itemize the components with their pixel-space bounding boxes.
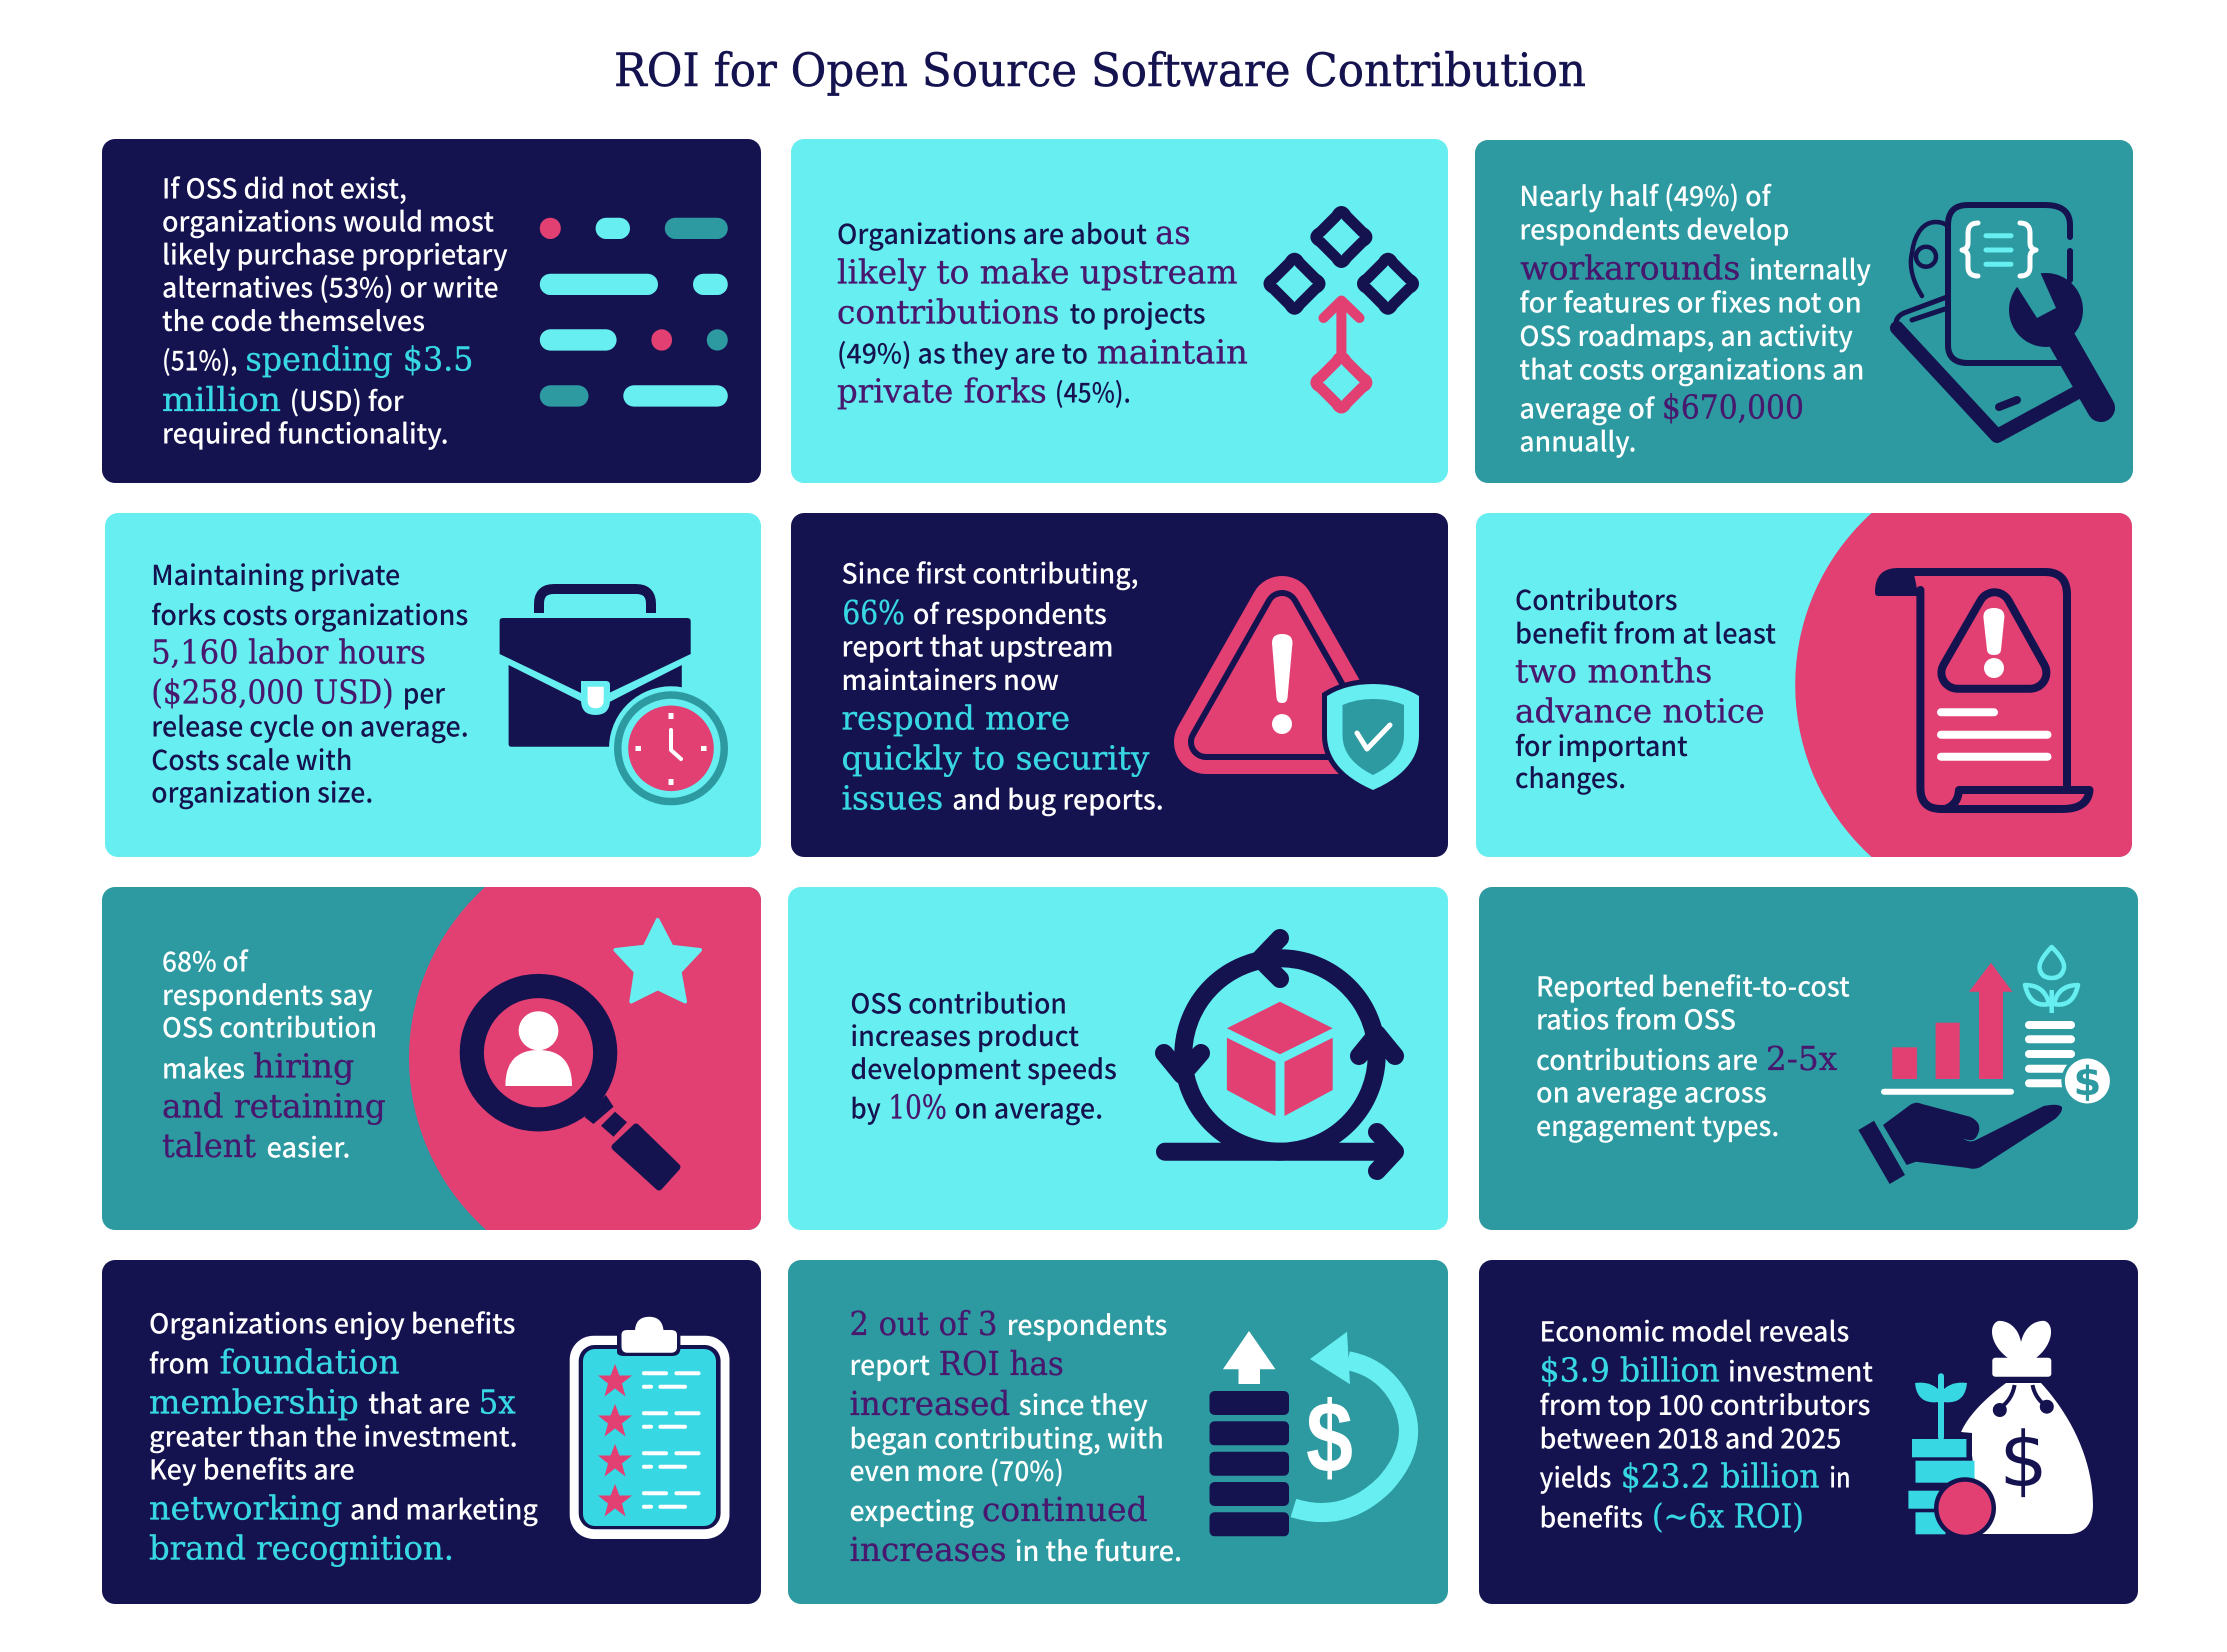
panel: hiring [102, 887, 761, 1230]
text block: that are [368, 1381, 470, 1421]
text block: networking [149, 1488, 342, 1527]
panel background [102, 887, 761, 1230]
panel background [791, 513, 1448, 857]
text block: increased [850, 1384, 1010, 1423]
text block: by [850, 1086, 881, 1126]
text block: in the future. [1015, 1529, 1182, 1569]
panel: benefit-to-cost [1479, 887, 2138, 1230]
text block: per [403, 671, 446, 711]
icon: clipboard with stars [570, 1313, 730, 1539]
text block: yields [1540, 1456, 1612, 1496]
icon: briefcase and clock [500, 589, 733, 810]
text block: ROI has [939, 1344, 1064, 1383]
text block: respondents say [162, 973, 373, 1013]
text block: two months [1515, 652, 1712, 691]
icon: money bag with plant and coins [1908, 1321, 2093, 1539]
text block: million [162, 380, 281, 419]
text block: issues [842, 778, 943, 817]
text block: private forks [837, 372, 1047, 411]
panel background [102, 1260, 761, 1604]
text block: (51%), [162, 339, 238, 379]
icon: money bag with plant and coins: $ [1999, 1415, 2048, 1504]
text block: report that upstream [842, 625, 1114, 665]
text block: from [149, 1341, 210, 1381]
text block: Key benefits are [149, 1447, 355, 1487]
icon: diamonds and arrow [1269, 212, 1414, 408]
text block: benefit from at least [1515, 611, 1776, 651]
text block: membership [149, 1382, 359, 1421]
panel background [788, 1260, 1448, 1604]
text block: since they [1019, 1383, 1148, 1423]
text block: talent [162, 1126, 256, 1165]
text block: maintain [1097, 332, 1248, 371]
text block: likely to make upstream [837, 252, 1238, 291]
text block: report [850, 1343, 930, 1383]
text block: on average across [1536, 1071, 1767, 1111]
text block: respond more [842, 698, 1070, 737]
text block: Since first contributing, [842, 551, 1138, 591]
text block [1536, 965, 1850, 1144]
text block: required functionality. [162, 412, 449, 452]
text block: to projects [1070, 291, 1206, 331]
panel: development speed [788, 887, 1448, 1230]
text block: the code themselves [162, 299, 425, 339]
text block: Organizations enjoy benefits [149, 1301, 516, 1341]
panel background [1476, 513, 2132, 857]
text block: 5,160 labor hours [151, 632, 426, 671]
icon: stack with dollar and arrows [1210, 1331, 1409, 1536]
text block: (49%) as they are to [837, 331, 1088, 371]
text block: Contributors [1515, 578, 1678, 618]
text block: 5x [479, 1382, 516, 1421]
text block: of respondents [913, 592, 1107, 632]
text block: (~6x ROI) [1652, 1496, 1804, 1535]
text block [1515, 578, 1776, 796]
title: ROI for Open Source Software Contribution [614, 43, 1586, 97]
text block: OSS contribution [850, 981, 1067, 1021]
text block: changes. [1515, 756, 1626, 796]
text block: increases [850, 1530, 1006, 1569]
text block: likely purchase proprietary [162, 232, 508, 272]
text block: respondents [1007, 1303, 1167, 1343]
text block: on average. [954, 1086, 1103, 1126]
text block: Reported benefit-to-cost [1536, 965, 1850, 1005]
text block: for important [1515, 724, 1688, 764]
panel background [102, 139, 761, 483]
text block: organizations would most [162, 200, 494, 240]
text block: engagement types. [1536, 1104, 1779, 1144]
text block: $670,000 [1662, 387, 1804, 426]
text block: annually. [1519, 420, 1636, 460]
text block: release cycle on average. [151, 705, 469, 745]
text block: expecting [850, 1489, 974, 1529]
icon: agile cycle with box [1164, 938, 1395, 1171]
panel: ROI has increased [788, 1260, 1448, 1604]
text block: foundation [220, 1342, 400, 1381]
panel: economic model [1479, 1260, 2138, 1604]
text block: quickly to security [842, 738, 1150, 777]
text block: development speeds [850, 1047, 1117, 1087]
text block: spending $3.5 [246, 340, 474, 379]
text block [151, 553, 469, 811]
panel background [791, 139, 1448, 483]
text block: and retaining [162, 1087, 386, 1126]
text block: OSS contribution [162, 1006, 377, 1046]
text block: Nearly half (49%) of [1519, 174, 1772, 214]
text block: continued [982, 1490, 1148, 1529]
icon: code pills [540, 218, 728, 407]
panel background [1475, 140, 2133, 483]
text block: contributions [837, 292, 1059, 331]
text block: workarounds [1520, 248, 1740, 287]
text block: organization size. [151, 771, 373, 811]
text block: advance notice [1515, 692, 1765, 731]
text block [149, 1301, 538, 1567]
text block: Maintaining private [151, 553, 400, 593]
text block [162, 940, 386, 1165]
icon: scroll with warning [1875, 568, 2090, 809]
icon: stack with dollar and arrows: $ [1306, 1382, 1353, 1494]
text block: ($258,000 USD) [151, 672, 394, 711]
text block: investment [1728, 1350, 1873, 1390]
text block: 2 out of 3 [850, 1304, 998, 1343]
text block: 10% [888, 1087, 947, 1126]
text block: Organizations are about [837, 212, 1147, 252]
text block: (45%). [1055, 371, 1131, 411]
text block [1519, 174, 1871, 460]
panel: security response [791, 513, 1448, 857]
panel: foundation membership [102, 1260, 761, 1604]
text block [850, 981, 1117, 1126]
text block: contributions are [1536, 1038, 1758, 1078]
text block [850, 1303, 1182, 1569]
icon: hand with growth chart: $ [2073, 1059, 2101, 1105]
pink half circle [1795, 513, 2132, 857]
icon: phones and wrench [1896, 205, 2101, 436]
icon: warning triangle and shield [1206, 608, 1419, 790]
text block: easier. [266, 1125, 350, 1165]
panel: if OSS did not exist [102, 139, 761, 483]
text block: Costs scale with [151, 738, 352, 778]
text block: $23.2 billion [1621, 1457, 1820, 1496]
text block: forks costs organizations [151, 593, 468, 633]
text block [837, 212, 1248, 411]
text block: greater than the investment. [149, 1415, 518, 1455]
text block: 66% [842, 593, 905, 632]
text block: that costs organizations an [1519, 347, 1864, 387]
panel background [1479, 1260, 2138, 1604]
text block: brand recognition. [149, 1528, 454, 1567]
icon: magnifier with person [472, 986, 677, 1187]
text block: $3.9 billion [1540, 1351, 1720, 1390]
text block [1540, 1310, 1873, 1535]
text block: average of [1519, 386, 1656, 426]
text block: alternatives (53%) or write [162, 266, 499, 306]
text block: between 2018 and 2025 [1540, 1416, 1842, 1456]
text block: Economic model reveals [1540, 1310, 1849, 1350]
text block: respondents develop [1519, 207, 1789, 247]
text block: and bug reports. [952, 777, 1164, 817]
text block: for features or fixes not on [1519, 281, 1862, 321]
panel background [1479, 887, 2138, 1230]
panel background [788, 887, 1448, 1230]
text block: and marketing [350, 1487, 538, 1527]
text block: maintainers now [842, 658, 1059, 698]
text block: hiring [253, 1046, 354, 1086]
text block [162, 166, 508, 452]
text block: 2-5x [1766, 1039, 1838, 1078]
panel: private forks cost [105, 513, 761, 857]
text block: even more (70%) [850, 1449, 1064, 1489]
text block: internally [1749, 247, 1871, 287]
text block: benefits [1540, 1495, 1643, 1535]
text block: If OSS did not exist, [162, 166, 407, 206]
icon: star [616, 920, 700, 1002]
text block: makes [162, 1046, 245, 1086]
text block: OSS roadmaps, an activity [1519, 314, 1853, 354]
text block: ratios from OSS [1536, 997, 1736, 1037]
text block: in [1829, 1456, 1851, 1496]
pink half circle [409, 887, 761, 1230]
icon: hand with growth chart [1858, 947, 2113, 1184]
text block: began contributing, with [850, 1416, 1164, 1456]
panel: advance notice [1476, 513, 2132, 857]
text block: from top 100 contributors [1540, 1383, 1870, 1423]
text block: (USD) for [290, 379, 404, 419]
text block: as [1155, 213, 1191, 252]
panel background [105, 513, 761, 857]
panel: workarounds [1475, 140, 2133, 483]
text block [842, 551, 1164, 817]
panel: upstream contributions [791, 139, 1448, 483]
text block: increases product [850, 1014, 1079, 1054]
text block: 68% of [162, 940, 249, 980]
